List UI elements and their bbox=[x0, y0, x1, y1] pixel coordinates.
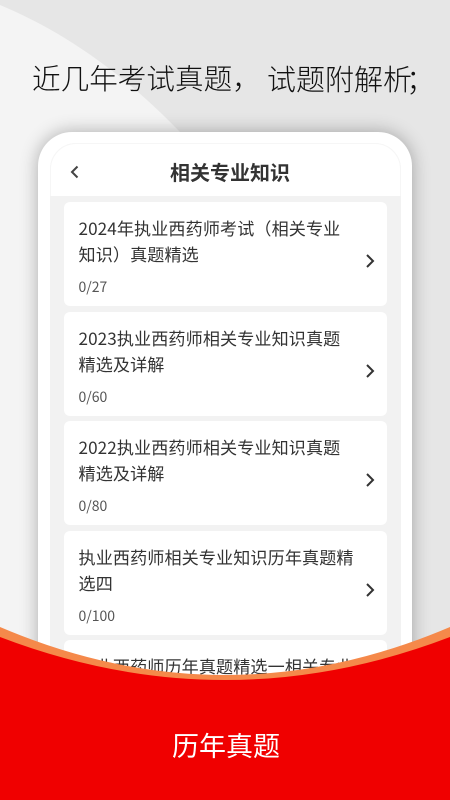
card title bbox=[78, 434, 340, 485]
card title: 执业西药师相关专业知识历年真题精 bbox=[78, 544, 354, 569]
card title bbox=[78, 215, 340, 266]
chevron bbox=[366, 583, 374, 597]
list card 4 bbox=[64, 531, 387, 635]
phone screen bbox=[50, 143, 401, 732]
progress: 0/80 bbox=[78, 496, 107, 516]
phone mockup bbox=[38, 132, 412, 732]
footer label: 历年真题 bbox=[172, 725, 280, 764]
list card 3 bbox=[64, 421, 387, 525]
list card 5 bbox=[64, 640, 387, 744]
card title: 精选及详解 bbox=[78, 460, 164, 485]
card title bbox=[78, 325, 340, 376]
screen heading: 相关专业知识 bbox=[170, 157, 290, 186]
back icon bbox=[70, 166, 78, 178]
chevron bbox=[366, 473, 374, 487]
title: 近几年考试真题， bbox=[32, 57, 261, 98]
card title: 2023执业西药师相关专业知识真题 bbox=[78, 325, 340, 350]
card title: 2022执业西药师相关专业知识真题 bbox=[78, 434, 340, 459]
progress: 0/100 bbox=[78, 606, 115, 626]
title bbox=[32, 57, 435, 99]
list card 1 bbox=[64, 202, 387, 306]
card title bbox=[78, 544, 354, 595]
chevron bbox=[366, 364, 374, 378]
card title: 执业西药师历年真题精选一相关专业 bbox=[78, 653, 354, 678]
card title: 选四 bbox=[78, 570, 113, 595]
bottom red wave bbox=[0, 627, 450, 800]
card title: 精选及详解 bbox=[78, 351, 164, 376]
screen header bbox=[50, 143, 401, 196]
title: 试题附解析； bbox=[267, 57, 435, 99]
card title: 2024年执业西药师考试（相关专业 bbox=[78, 215, 340, 240]
chevron bbox=[366, 254, 374, 268]
progress: 0/60 bbox=[78, 387, 107, 407]
card title: 知识）真题精选 bbox=[78, 241, 199, 266]
progress: 0/27 bbox=[78, 277, 107, 297]
list card 2 bbox=[64, 312, 387, 416]
